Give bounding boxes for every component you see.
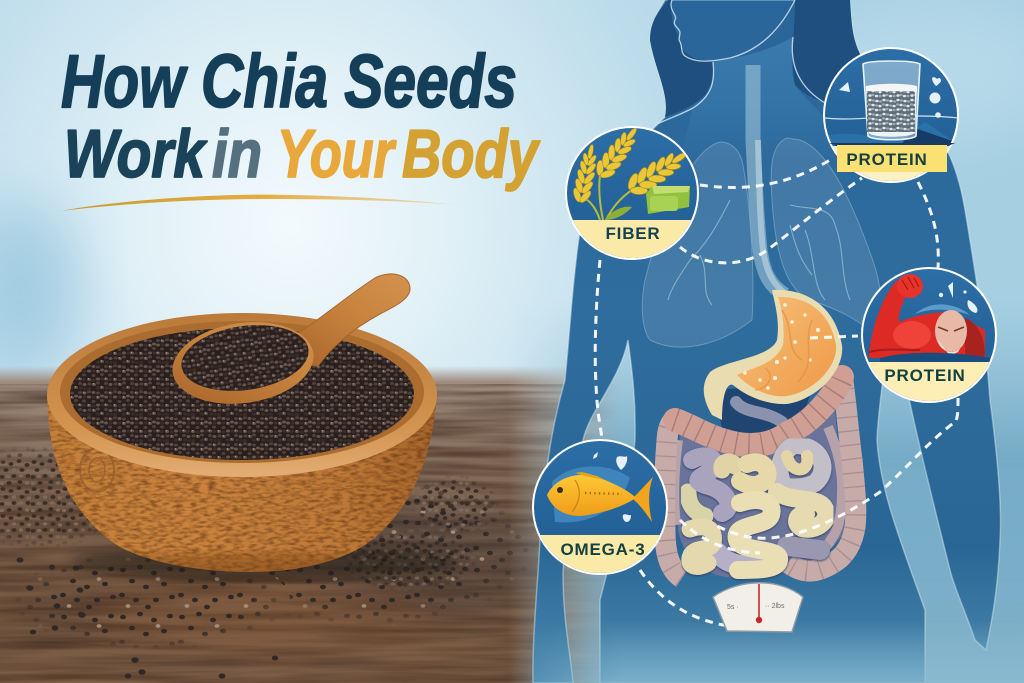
small intestine loops <box>688 445 826 570</box>
lungs <box>642 138 882 347</box>
trachea and esophagus <box>753 65 785 295</box>
dark label top edge <box>829 143 955 146</box>
bowl rim <box>47 313 437 477</box>
title line 2: Work: Work <box>64 116 208 192</box>
bowl body <box>47 395 437 572</box>
dashed connector lines <box>595 160 958 627</box>
wooden table <box>0 366 620 683</box>
narrow inner colon bands <box>674 427 842 560</box>
label: PROTEIN <box>846 150 928 169</box>
label band <box>832 146 950 181</box>
transverse colon <box>675 377 842 445</box>
dark hill behind label <box>900 128 955 146</box>
label: FIBER <box>606 224 660 243</box>
neck highlight <box>680 37 860 160</box>
label band <box>869 362 989 401</box>
title line 2: Your: Your <box>277 116 397 192</box>
scattered chia seeds on table <box>0 448 528 679</box>
intestines <box>665 375 856 578</box>
icon: wheat stalks <box>573 128 686 220</box>
stomach <box>704 290 842 420</box>
abdominal cavity <box>678 410 845 578</box>
hair <box>650 0 713 117</box>
icon: sweat drops <box>939 282 977 313</box>
icon: muscular figure <box>869 274 990 364</box>
bowl shadow <box>70 544 460 580</box>
seeds filling the bowl <box>70 328 414 460</box>
face and neck outline <box>655 0 825 125</box>
icon: goldfish <box>547 472 653 522</box>
label band <box>573 220 691 258</box>
icon: green box <box>646 186 690 214</box>
scale gauge: ·· 2lbs <box>765 603 785 610</box>
badge: omega-3 <box>532 438 668 577</box>
large intestine outer bands <box>665 375 856 578</box>
label: OMEGA-3 <box>561 540 645 559</box>
pocket under stomach <box>715 388 810 435</box>
badge: fiber <box>565 121 700 262</box>
title underline swoosh <box>61 195 458 211</box>
wooden bowl of chia seeds <box>47 274 460 590</box>
title line 2: Body: Body <box>402 116 541 192</box>
wooden spoon <box>167 274 410 412</box>
badge: protein glass <box>823 47 959 186</box>
scale gauge: 5s · <box>727 604 739 611</box>
icon: hearts and droplets <box>593 452 631 522</box>
human body silhouette <box>500 0 1024 683</box>
icon: glass of chia seeds <box>863 61 920 140</box>
icon: droplets and heart <box>839 77 941 118</box>
label: PROTEIN <box>884 366 966 385</box>
duodenum loop <box>736 402 782 422</box>
title <box>61 39 541 192</box>
title line 2: in: in <box>212 116 262 192</box>
title line 1: How Chia Seeds <box>61 39 517 123</box>
label band <box>540 535 660 573</box>
badge: protein muscle <box>861 267 997 404</box>
bottom fog <box>518 629 1024 683</box>
scale gauge <box>713 583 803 632</box>
label plate <box>837 145 947 172</box>
